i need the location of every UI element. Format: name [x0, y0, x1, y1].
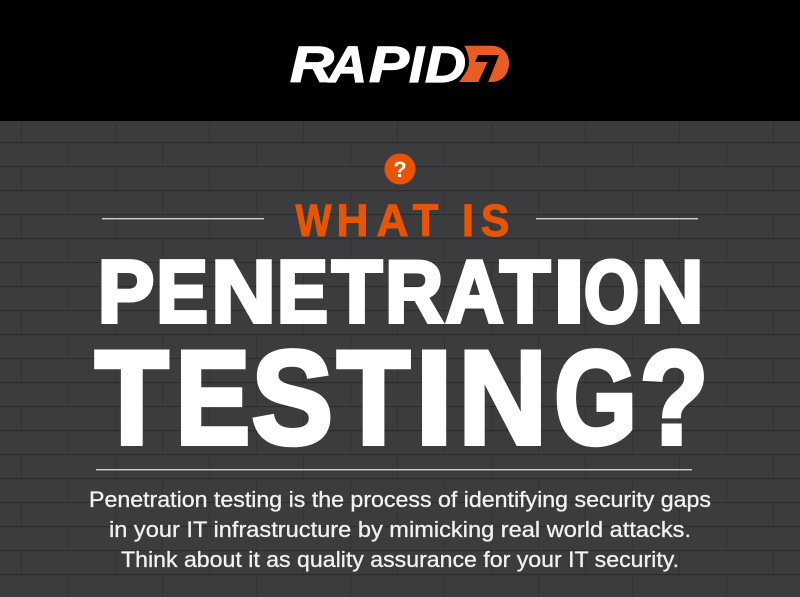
icon: question mark badge: ?: [393, 157, 407, 182]
header band: [0, 0, 800, 121]
title: penetration: T: [332, 242, 382, 341]
description line 2: in your IT infrastructure by mimicking real world attacks.: [109, 517, 691, 542]
logo wordmark: D: [425, 36, 466, 93]
title: testing: I: [416, 324, 453, 472]
rule under title: [96, 469, 692, 470]
heading: what is: S: [481, 195, 509, 246]
title: testing: S: [252, 324, 333, 472]
description text block: [89, 487, 711, 572]
brick wall background: [0, 121, 800, 597]
logo: Rapid7: [290, 36, 509, 93]
heading: what is: T: [413, 195, 438, 246]
left rule beside heading: [102, 218, 264, 219]
logo wordmark: I: [409, 36, 426, 93]
title: testing: T: [95, 324, 168, 472]
title: penetration: R: [385, 242, 443, 341]
title: penetration: I: [553, 242, 585, 341]
title: penetration: A: [446, 242, 504, 341]
description line 1: Penetration testing is the process of identifying security gaps: [89, 487, 711, 512]
title: testing: ?: [640, 324, 708, 472]
title: testing: T: [337, 324, 410, 472]
title: penetration: E: [277, 242, 328, 341]
title: penetration: P: [98, 242, 154, 341]
heading: what is: W: [296, 195, 332, 246]
title: penetration: T: [500, 242, 550, 341]
logo wordmark: R: [290, 36, 334, 93]
description line 3: Think about it as quality assurance for your IT security.: [121, 547, 679, 572]
title: testing: E: [176, 324, 250, 472]
title: testing: G: [554, 324, 637, 472]
heading: what is: I: [462, 195, 474, 246]
title: penetration: N: [641, 242, 704, 341]
heading: what is: H: [336, 195, 368, 246]
heading: what is: A: [376, 195, 408, 246]
title: penetration: O: [584, 242, 639, 341]
title: penetration: E: [156, 242, 208, 341]
title: testing: N: [459, 324, 547, 472]
icon: question mark badge: [384, 154, 416, 184]
logo mark: orange D with black 7: [459, 46, 509, 82]
logo wordmark: P: [369, 36, 410, 93]
right rule beside heading: [536, 218, 698, 219]
title: penetration: N: [211, 242, 276, 341]
logo wordmark: A: [327, 36, 367, 93]
